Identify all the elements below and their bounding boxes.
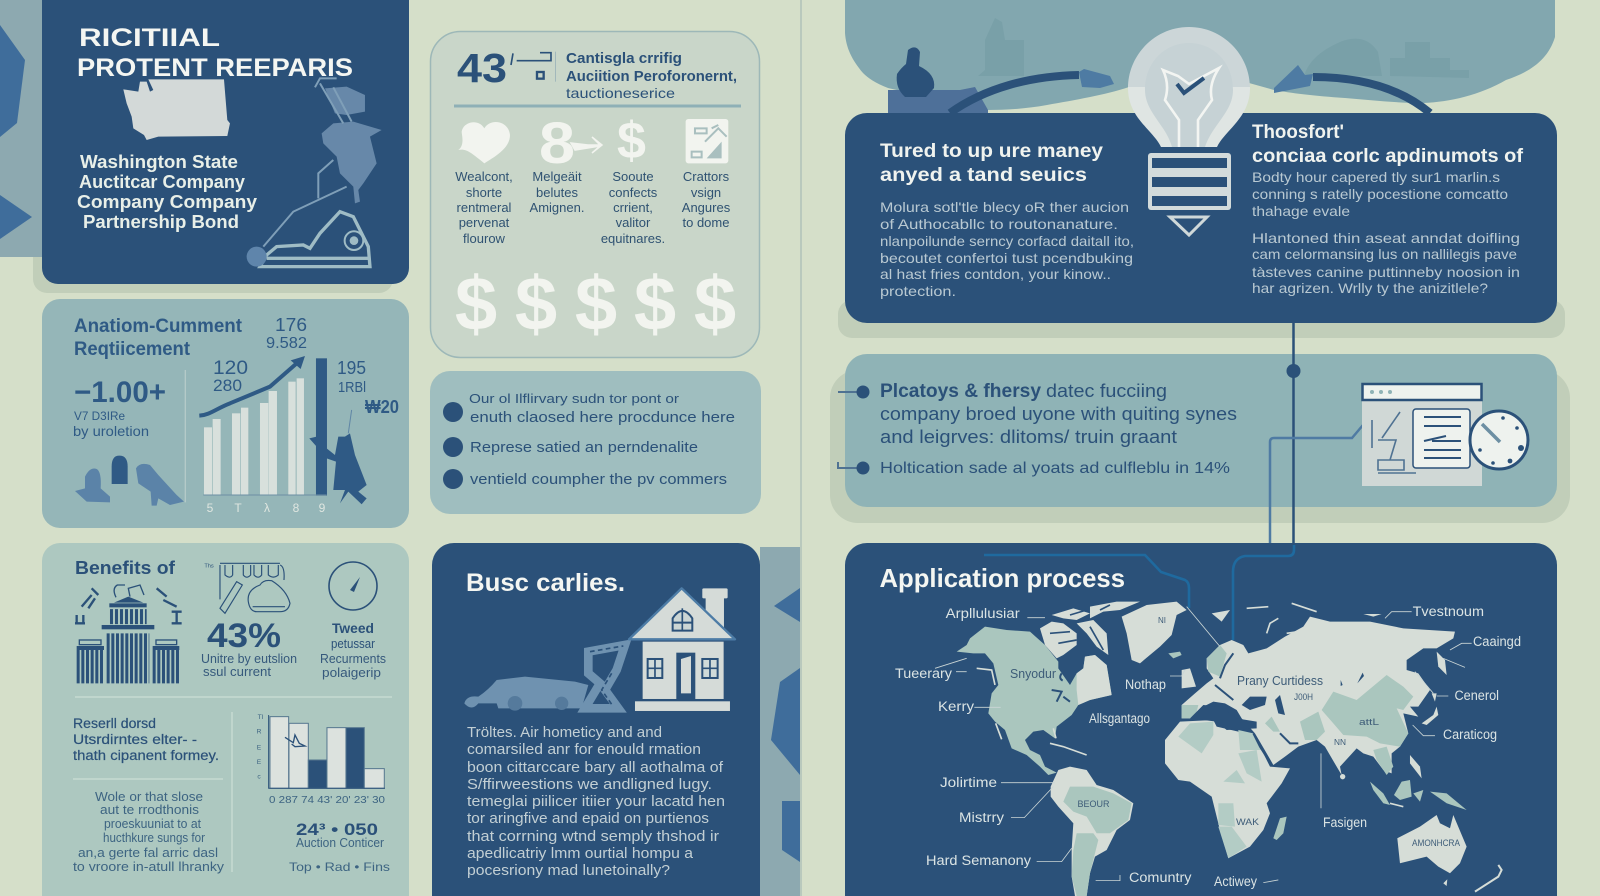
subtitle text: Partnership Bond <box>83 212 239 232</box>
icons: row of dollar signs: $ <box>575 262 617 347</box>
panel: bullet list <box>430 371 761 514</box>
map labels: Caaingd <box>1473 634 1521 649</box>
chart value labels: 120 <box>213 358 248 379</box>
icon: light bulb <box>1128 27 1250 235</box>
column 4: Crattors <box>683 169 730 184</box>
bar chart: R <box>257 729 262 736</box>
body text: Plcatoys & fhersy <box>880 381 1041 402</box>
bar chart <box>185 356 367 504</box>
column 2: Melgeäit <box>532 169 582 184</box>
stat: 43 percent: ssul current <box>203 665 272 679</box>
Red Sea, Gulf and Baltic <box>1215 653 1298 765</box>
Arctic islands <box>1052 602 1140 655</box>
icons: row of dollar signs: $ <box>515 262 557 347</box>
bar chart: TI <box>258 714 264 721</box>
stat: tweed text: polaigerip <box>322 666 381 680</box>
chart value labels <box>213 315 399 417</box>
body text: that corrning wtnd semply thshod ir <box>467 829 719 845</box>
icons: tools <box>75 456 184 506</box>
labels on land: AMONHCRA <box>1412 838 1460 848</box>
body text: apedlicatriy lmm ourtial hompu a <box>467 846 694 862</box>
column 1: rentmeral <box>457 200 512 215</box>
panel: application process world map <box>845 543 1557 896</box>
heading: Application process <box>880 563 1125 593</box>
chart value labels: ₩20 <box>365 397 399 417</box>
column 1 <box>455 169 513 246</box>
map leader lines west <box>935 618 1120 881</box>
panel: house and text <box>432 543 760 896</box>
Iberia shading <box>1182 705 1198 718</box>
South-East Asia shading <box>1373 747 1393 775</box>
stat: tweed text <box>320 620 386 680</box>
column 4: to dome <box>683 215 729 230</box>
chart axis labels: T <box>234 501 242 515</box>
Brazil shading <box>1063 787 1132 833</box>
icon: excavator <box>464 645 625 711</box>
labels on land: Prany Curtidess <box>1237 673 1323 688</box>
panel: benefits <box>42 543 409 896</box>
right body text: conning s ratelly pocestione comcatto <box>1252 186 1508 202</box>
map labels: Tueerary <box>895 666 952 681</box>
column 3: crrient, <box>613 200 653 215</box>
column 3: confects <box>609 185 658 200</box>
icon: house <box>629 588 735 711</box>
map connector lines <box>984 545 1294 640</box>
panel: 43 auction performance <box>430 32 760 358</box>
map: Washington state <box>123 79 230 140</box>
chart axis labels: 8 <box>293 501 300 515</box>
connector lines <box>838 323 1363 545</box>
map labels: Tvestnoum <box>1413 604 1484 619</box>
column 2: belutes <box>536 185 578 200</box>
heading: Busc carlies. <box>466 569 625 597</box>
Africa shaded countries <box>1178 722 1262 858</box>
left body text: Molura sotl'tle blecy oR ther aucion <box>880 199 1129 215</box>
Middle East shading <box>1265 717 1280 732</box>
body text: S/ffirweestions we andligned lugy. <box>467 777 712 793</box>
stat: auction counter: 24³ • 050 <box>296 820 378 839</box>
icon: heart <box>458 122 510 163</box>
map labels: Nothap <box>1125 677 1166 692</box>
key figure: −1.00+ <box>74 376 166 409</box>
Mediterranean <box>1190 705 1257 730</box>
Arctic Canada mainland <box>1040 622 1077 658</box>
left heading: anyed a tand seuics <box>880 165 1087 186</box>
stat: auction counter: Top • Rad • Fins <box>289 860 390 874</box>
left body text: al hast fries contdon, your kinow.. <box>880 266 1111 282</box>
subtitle text <box>77 152 257 232</box>
icon: house document <box>686 119 728 163</box>
heading: Anatiom-Cumment <box>74 316 243 337</box>
text block: summary: Reserll dorsd <box>73 716 156 731</box>
map labels: Arpllulusiar <box>946 606 1020 621</box>
Iceland <box>1168 652 1182 658</box>
Australia <box>1397 815 1467 873</box>
heading: Cantisgla crrifig <box>566 50 682 67</box>
China shading <box>1322 675 1413 747</box>
Eurasia <box>1182 617 1455 775</box>
labels on land: BEOUR <box>1078 799 1110 809</box>
stat: 43 percent <box>201 617 297 679</box>
labels on land: attL <box>1359 717 1379 727</box>
stat: 43 percent: 43% <box>207 617 281 655</box>
stat number: 43 <box>457 45 507 91</box>
stat: tweed text: Recurments <box>320 652 386 666</box>
heading: Auciition Peroforonernt, <box>566 68 737 85</box>
panel: dark two-column text with bulb <box>838 113 1565 338</box>
map labels: Actiwey <box>1214 874 1257 889</box>
Pakistan shading <box>1300 712 1325 740</box>
left heading <box>880 141 1103 186</box>
icon: columned building <box>75 585 182 667</box>
icon: seated figure with cable <box>888 47 1114 114</box>
column 1: shorte <box>466 185 502 200</box>
stat: auction counter <box>289 820 390 874</box>
map labels: Allsgantago <box>1089 711 1150 726</box>
key figure: V7 D3IRe <box>74 409 125 423</box>
New Zealand and Tasmania <box>1475 865 1502 892</box>
body text: tor aringfive and epaid on purtienos <box>467 811 709 827</box>
right-side decorative block with hexagons <box>760 547 800 896</box>
text block: centered note: Wole or that slose <box>95 789 203 804</box>
title <box>77 24 353 82</box>
labels on land: NN <box>1334 738 1346 747</box>
icon: machinery silhouette <box>247 78 382 267</box>
left body text: of Authocabllc to routonanature. <box>880 216 1118 232</box>
icon: coin to dollar arrow: $ <box>617 112 646 170</box>
chart axis labels: 0 287 74 43' 20' 23' 30 <box>269 795 385 806</box>
text block: centered note: proeskuuniat to at <box>104 816 201 831</box>
subtitle text: Auctitcar Company <box>79 172 245 192</box>
South America <box>1051 767 1133 896</box>
title: RICITIIAL <box>79 24 220 52</box>
heading: Reqtiicement <box>74 339 191 360</box>
body text: and leigrves: dlitoms/ truin graant <box>880 427 1177 447</box>
map labels: Kerry <box>938 699 974 714</box>
icons: row of dollar signs: $ <box>694 262 736 347</box>
icons: row of dollar signs <box>455 262 736 347</box>
bullet text: Our ol Ilflirvary sudn tor pont or <box>469 391 680 406</box>
labels on land <box>1010 616 1460 848</box>
map labels: Comuntry <box>1129 870 1192 885</box>
chart axis labels: 9 <box>319 501 326 515</box>
column 3 <box>601 169 665 246</box>
bullet text <box>469 391 735 488</box>
stat: tweed text: Tweed <box>332 620 374 636</box>
map labels: Cenerol <box>1454 688 1499 703</box>
subtitle text: Washington State <box>80 152 238 172</box>
Arctic channels <box>1050 605 1110 650</box>
key figure <box>73 376 166 439</box>
right heading: Thoosfort' <box>1252 122 1344 143</box>
body text: company broed uyone with quiting synes <box>880 404 1237 424</box>
bar chart: E <box>257 745 262 752</box>
stat: tweed text: petussar <box>331 636 376 651</box>
text block: summary: Utsrdirntes elter- - <box>73 732 197 747</box>
body text: datec fucciing <box>1046 381 1167 401</box>
column 3: valitor <box>616 215 651 230</box>
text columns <box>455 169 731 246</box>
bar chart: E <box>257 759 262 766</box>
left decorative background with hexagons <box>0 0 42 257</box>
chart axis labels: λ <box>264 501 270 515</box>
chart value labels: 195 <box>337 358 366 378</box>
text block: summary <box>73 716 219 763</box>
text block: centered note: aut te rrodthonis <box>100 802 200 817</box>
body text <box>880 381 1237 477</box>
map labels: Caraticog <box>1443 727 1497 742</box>
bullet text: ventield coumpher the pv commers <box>470 471 727 488</box>
column 1: pervenat <box>459 215 510 230</box>
icon: right cable <box>1274 65 1430 113</box>
column 4 <box>682 169 731 230</box>
column 4: Angures <box>682 200 731 215</box>
column 2: Amignen. <box>530 200 584 215</box>
bar chart <box>257 714 385 788</box>
Black and Caspian seas <box>1242 673 1364 715</box>
markers <box>856 364 1300 474</box>
column 3: equitnares. <box>601 231 665 246</box>
Africa <box>1165 720 1290 858</box>
left body text <box>880 199 1134 299</box>
map labels: Jolirtime <box>940 775 997 790</box>
right body text: Bodty hour capered tly sur1 marlin.s <box>1252 169 1500 185</box>
North America <box>957 627 1112 775</box>
world map: Americas and Greenland <box>935 602 1187 896</box>
chart axis labels: 5 <box>207 501 214 515</box>
icon: small key <box>511 52 555 82</box>
panel: teal text with window icon <box>830 323 1570 545</box>
bullet text: Represe satied an perndenalite <box>470 439 698 456</box>
Indonesia and islands <box>1370 780 1467 810</box>
text block: centered note: to vroore in-atull lhranky <box>73 859 225 874</box>
heading: tauctioneserice <box>566 85 675 101</box>
text block: centered note: an,a gerte fal arric dasl <box>78 845 218 860</box>
bar chart: c <box>257 774 261 781</box>
coastal islands <box>977 668 1087 755</box>
right body text: tàsteves canine puttinneby noosion in <box>1252 264 1520 280</box>
chart value labels: 9.582 <box>266 335 307 352</box>
column 3: Sooute <box>612 169 654 184</box>
map labels: Hard Semanony <box>926 853 1031 868</box>
map labels <box>895 604 1521 889</box>
top banner blob with faint silhouettes <box>845 0 1555 110</box>
chart axis labels <box>207 501 326 515</box>
icon: gauge <box>329 562 377 610</box>
right body text <box>1252 169 1520 296</box>
right body text: Hlantoned thin aseat anndat doifling <box>1252 230 1520 246</box>
column 1: flourow <box>463 231 506 246</box>
chart value labels: 1RBl <box>338 379 366 396</box>
right body text: thahage evale <box>1252 203 1350 219</box>
icon: window, document and clock <box>1362 383 1528 486</box>
column 1: Wealcont, <box>455 169 513 184</box>
map leader lines east <box>1170 607 1472 883</box>
key figure: by uroletion <box>73 423 149 439</box>
Madagascar <box>1273 817 1287 840</box>
panel: hero title with Washington map <box>42 0 409 284</box>
left body text: protection. <box>880 283 956 299</box>
bullet text: enuth claosed here procdunce here <box>470 409 735 426</box>
stat: auction counter: Auction Conticer <box>296 836 384 850</box>
bullet markers <box>443 402 463 489</box>
heading: Benefits of <box>75 558 176 578</box>
world map: Eurasia, Africa, Australia <box>1165 603 1502 892</box>
body text: Holtication sade al yoats ad culfleblu in 14% <box>880 460 1230 477</box>
right body text: cam celormansing lus on nallilegis pave <box>1252 246 1517 262</box>
subtitle text: Company Company <box>77 192 257 212</box>
chart value labels: 176 <box>275 315 307 335</box>
left heading: Tured to up ure maney <box>880 141 1103 162</box>
body text: pocesriony mad lunetoinally? <box>467 863 670 879</box>
body text: boon cittarccare bary all aothalma of <box>467 760 724 776</box>
Argentina shading <box>1072 833 1098 896</box>
text block: summary: thath cipanent formey. <box>73 748 219 763</box>
labels on land: Snyodur <box>1010 666 1057 681</box>
body text: Tröltes. Air hometicy and and <box>467 725 662 741</box>
left body text: becoutet confertoi tust pcendbuking <box>880 250 1133 266</box>
body text: comarsiled anr for enould rmation <box>467 742 701 758</box>
icon: coin to dollar arrow: 8 <box>539 111 575 176</box>
panel: anatomy bar chart <box>42 299 409 528</box>
Scandinavia shading <box>1207 645 1227 677</box>
icon: line drawing objects: Ths <box>204 563 214 569</box>
map labels: Mistrry <box>959 810 1004 825</box>
icon: coin to dollar arrow <box>539 111 646 176</box>
right body text: har agrizen. Wrlly ty the anizitlele? <box>1252 280 1488 296</box>
column 2 <box>530 169 584 215</box>
icons: row of dollar signs: $ <box>634 262 676 347</box>
stat: 43 percent: Unitre by eutslion <box>201 652 297 666</box>
Great Lakes <box>1052 673 1070 702</box>
heading <box>74 316 243 360</box>
left body text: nlanpoilunde serncy corfacd daitall ito, <box>880 233 1134 249</box>
text block: centered note <box>73 789 225 874</box>
body text <box>467 725 725 879</box>
labels on land: J00H <box>1294 692 1313 702</box>
right heading <box>1252 122 1524 167</box>
column 4: vsign <box>691 185 721 200</box>
heading <box>566 50 737 101</box>
icon: line drawing objects <box>204 563 290 613</box>
labels on land: NI <box>1158 616 1166 625</box>
panel shadow under hero <box>33 240 393 293</box>
right heading: conciaa corlc apdinumots of <box>1252 146 1524 167</box>
eastern Canada <box>1077 655 1112 705</box>
labels on land: WAK <box>1236 817 1259 827</box>
icons: row of dollar signs: $ <box>455 262 497 347</box>
title: PROTENT REEPARIS <box>77 54 353 82</box>
Greenland <box>1122 602 1187 663</box>
body text: temeglai piilicer itiier your lacatd hen <box>467 794 725 810</box>
chart value labels: 280 <box>213 376 242 395</box>
map labels: Fasigen <box>1323 815 1367 830</box>
text block: centered note: hucthkure sungs for <box>103 830 206 845</box>
